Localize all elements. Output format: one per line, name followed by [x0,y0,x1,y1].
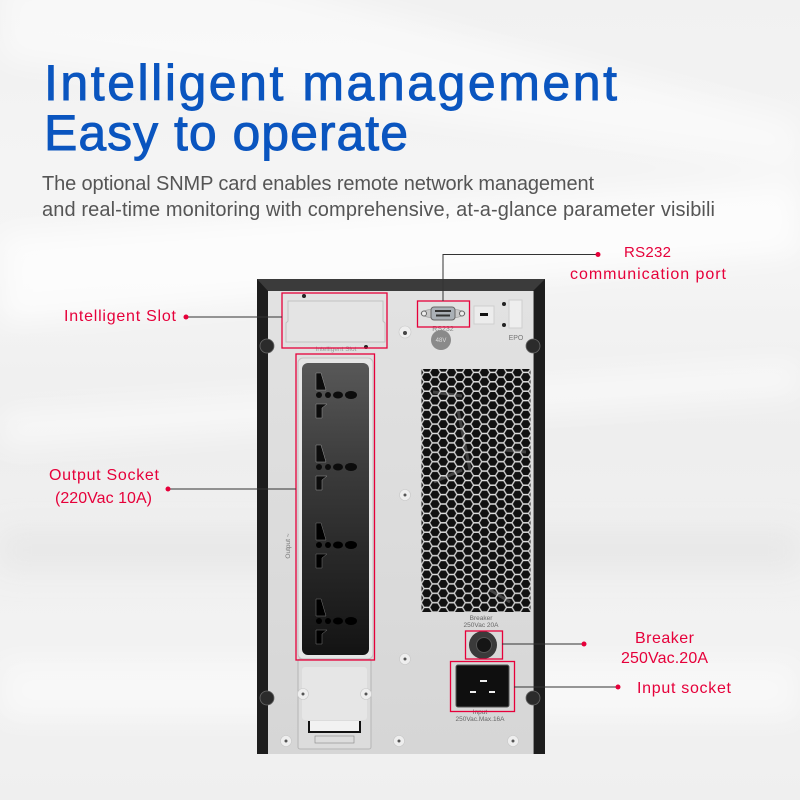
subtitle: and real-time monitoring with comprehensive, at-a-glance parameter visibili [42,199,715,221]
RS232 port [421,307,465,333]
EPO: EPO [509,335,524,342]
callout: Output Socket: (220Vac 10A) [55,490,152,507]
breaker: Breaker [470,615,493,622]
ventilation grille [422,369,530,612]
callout: RS232 communication port: communication port [570,266,727,283]
socket 2 [316,445,357,490]
terminal cover [298,659,371,749]
title: Intelligent management [44,55,617,111]
input socket: Input [473,709,487,716]
callout: Output Socket [49,467,296,507]
subtitle: The optional SNMP card enables remote network management [42,173,594,195]
intelligent slot [286,294,385,353]
callout: Input socket: Input socket [637,680,732,697]
subtitle [42,173,715,221]
breaker [464,615,499,659]
intelligent slot: Intelligent Slot [316,346,357,353]
red highlight boxes [282,293,514,712]
socket 3 [316,523,357,568]
callout: RS232 communication port: RS232 [624,244,671,261]
title: Easy to operate [44,105,408,161]
callout: Breaker: 250Vac.20A [621,650,708,667]
switch [474,306,494,324]
callout: Intelligent Slot: Intelligent Slot [64,308,177,325]
callout: Breaker: Breaker [635,630,695,647]
callout: Output Socket: Output Socket [49,467,160,484]
callout: RS232 communication port [443,244,727,301]
socket 4 [316,599,357,644]
corner screws [260,339,540,705]
cabinet frame [257,279,545,754]
input socket: 250Vac.Max.16A [455,716,505,723]
breaker: 250Vac 20A [464,622,499,629]
UPS rear panel [257,279,545,754]
callout: Breaker [502,630,708,667]
warning label and screw [399,326,451,350]
input socket [455,665,509,723]
screw centres [284,494,514,742]
panel screws [280,490,518,746]
RS232 port: RS232 [432,326,454,333]
callout: Input socket [514,680,732,697]
callout: Intelligent Slot [64,308,282,325]
warning label and screw: 48V [436,338,446,344]
socket 1 [316,373,357,418]
output socket panel [298,358,373,659]
output text: Output ~ [285,533,292,559]
EPO [502,300,524,342]
title [44,55,617,161]
